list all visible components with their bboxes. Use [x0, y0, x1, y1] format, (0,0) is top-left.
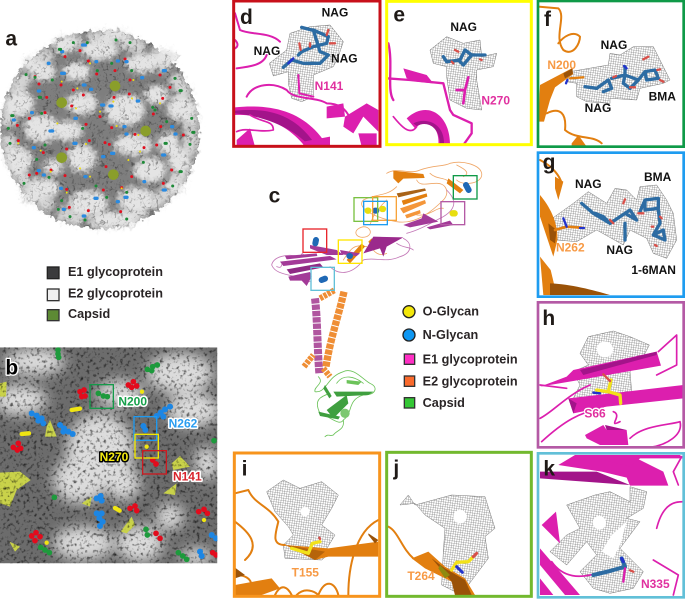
E1 ectodomain purple ribbons	[272, 190, 454, 286]
site box N270	[135, 434, 158, 458]
blue glycans	[13, 45, 176, 216]
panel a: virus particle surface	[1, 28, 199, 229]
label N262: N262	[169, 416, 198, 430]
label N141: N141	[173, 470, 202, 484]
ribbon	[538, 7, 602, 147]
region boxes	[303, 176, 477, 290]
panel letter h: h	[542, 307, 555, 330]
density mesh	[550, 487, 647, 593]
glycan sticks	[443, 50, 485, 65]
ribbon	[540, 455, 683, 595]
frame d	[234, 1, 380, 146]
frame e	[387, 1, 531, 145]
label N262: N262	[556, 240, 585, 254]
panel e: N270 glycan	[387, 1, 531, 145]
frame g	[538, 153, 684, 297]
density mesh	[550, 185, 677, 258]
residue sticks	[593, 558, 633, 582]
residue sticks	[292, 538, 320, 553]
ribbon	[387, 43, 472, 145]
label NAG: NAG	[450, 20, 477, 34]
legend Capsid	[404, 396, 465, 410]
legend N-Glycan: N-Glycan	[423, 328, 478, 342]
site box N200	[90, 385, 113, 408]
label NAG upper: NAG	[575, 177, 602, 191]
label BMA: BMA	[644, 170, 672, 184]
legend E2 glycoprotein: E2 glycoprotein	[423, 375, 518, 389]
panel letter j: j	[392, 457, 399, 480]
density mesh	[567, 47, 670, 103]
yellow glycans	[18, 63, 160, 193]
panel h: S66 O-glycan	[538, 302, 684, 447]
density mesh	[430, 37, 497, 110]
panel b: zoomed surface with labelled glycan sites	[0, 347, 220, 565]
label NAG bottom: NAG	[585, 101, 611, 115]
residue sticks	[452, 553, 477, 572]
glycan sticks	[283, 27, 335, 67]
panel letter d: d	[240, 6, 253, 29]
frame h	[538, 302, 684, 447]
label 1-6MAN: 1-6MAN	[631, 263, 676, 277]
panel letter k: k	[543, 457, 555, 480]
glycan sticks	[585, 67, 658, 92]
label NAG left: NAG	[254, 44, 280, 58]
panel letter i: i	[242, 458, 248, 481]
panel d: N141 glycan	[234, 1, 380, 147]
residue sticks	[457, 77, 468, 103]
site box N141	[143, 451, 166, 474]
ribbon	[235, 13, 378, 147]
red glycans	[13, 382, 216, 555]
legend O-Glycan: O-Glycan	[423, 305, 479, 319]
panel letter f: f	[544, 8, 552, 31]
E2 legend entry: E2 glycoprotein	[68, 286, 163, 300]
panel letter b: b	[5, 357, 18, 380]
density mesh	[400, 495, 495, 592]
green glycans	[8, 40, 194, 220]
Capsid legend entry: Capsid	[68, 307, 110, 321]
label T155: T155	[292, 566, 319, 580]
label S66: S66	[584, 406, 606, 420]
ribbon	[540, 160, 610, 295]
panel k: N335 glycan	[538, 453, 684, 597]
frame k	[538, 453, 684, 597]
density mesh	[267, 480, 338, 560]
label N200: N200	[118, 394, 147, 408]
capsid ribbon	[315, 371, 375, 437]
density mesh	[573, 330, 650, 398]
panel letter c: c	[269, 184, 281, 207]
label N141: N141	[315, 79, 344, 93]
frame j	[387, 452, 531, 596]
site box N262	[134, 417, 157, 440]
panel f: N200 glycan	[538, 1, 684, 147]
label NAG right: NAG	[331, 51, 358, 65]
E1 legend entry: E1 glycoprotein	[68, 265, 163, 279]
legend for panels a and b	[47, 265, 163, 321]
label N270: N270	[481, 94, 510, 108]
panel c: ribbon model of E1, E2 and capsid	[269, 162, 518, 437]
frame f	[538, 1, 684, 147]
glycan sticks	[582, 198, 665, 240]
red glycans	[17, 51, 183, 212]
panel g: N262 glycan	[538, 151, 684, 297]
panel letter g: g	[543, 151, 555, 174]
ribbon	[235, 490, 378, 595]
label NAG top: NAG	[601, 38, 627, 52]
surface map	[0, 347, 220, 565]
yellow glycans	[22, 392, 204, 543]
label NAG lower: NAG	[606, 243, 633, 257]
label N335: N335	[641, 577, 670, 591]
ribbon	[540, 335, 683, 447]
legend Capsid: Capsid	[423, 396, 465, 410]
green glycans	[41, 350, 214, 559]
density mesh	[269, 25, 343, 102]
panel i: T155 O-glycan	[234, 453, 380, 596]
blue glycans	[32, 407, 216, 556]
residue sticks	[593, 374, 621, 403]
label N270: N270	[100, 450, 129, 464]
ribbon	[388, 527, 475, 595]
stalk helices	[304, 290, 344, 377]
label BMA: BMA	[649, 89, 676, 103]
panel letter a: a	[5, 28, 17, 51]
virion sphere	[1, 29, 199, 229]
label N200: N200	[547, 58, 576, 72]
legend E1 glycoprotein: E1 glycoprotein	[423, 353, 518, 367]
glycan spheres	[315, 185, 469, 280]
E2 ectodomain orange ribbons	[343, 162, 482, 263]
label NAG top: NAG	[322, 5, 348, 19]
frame i	[234, 453, 380, 596]
panel letter e: e	[393, 3, 405, 26]
panel j: T264 O-glycan	[387, 452, 531, 596]
label T264: T264	[407, 569, 435, 583]
capsid patches	[62, 86, 146, 175]
